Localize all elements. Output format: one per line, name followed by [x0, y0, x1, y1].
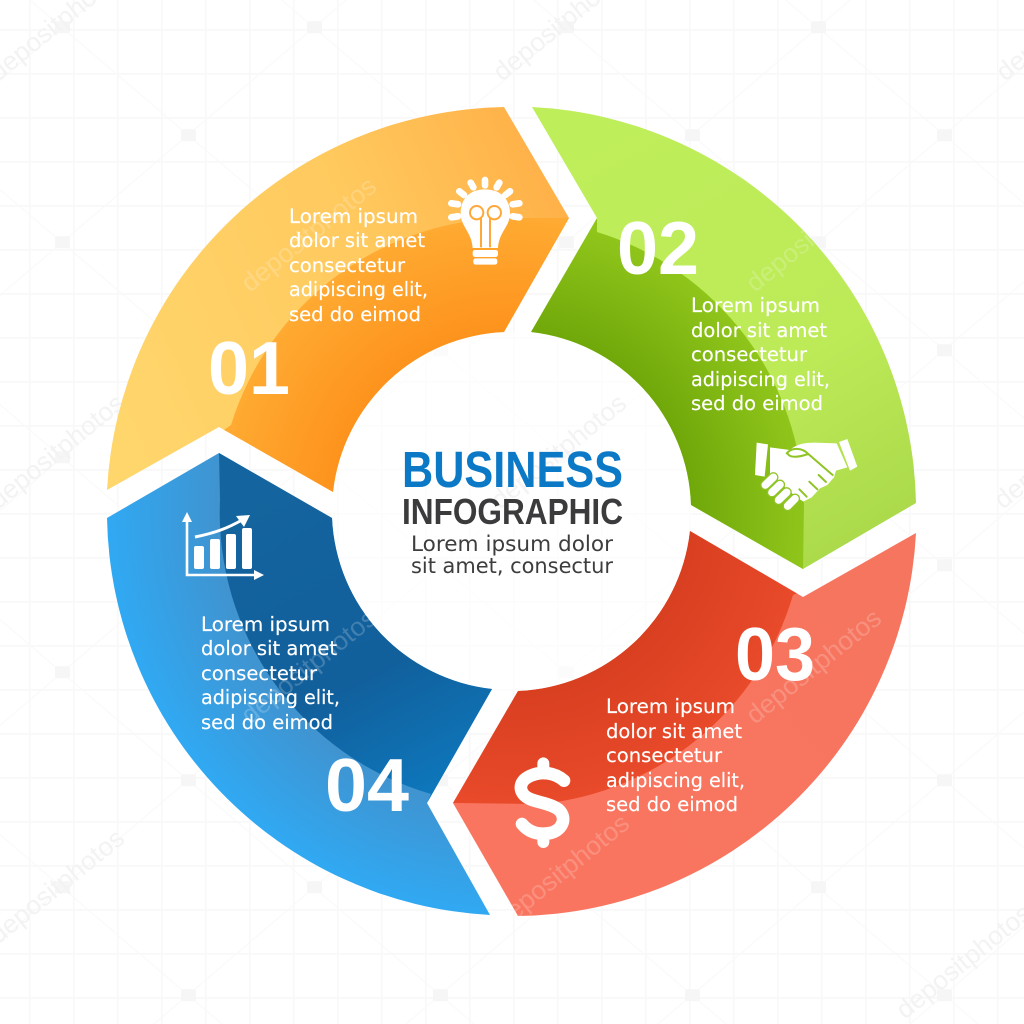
icon: handshake [755, 439, 857, 506]
text block: segment 04: Lorem ipsum [201, 613, 330, 636]
text block: segment 03 [606, 695, 745, 816]
text: depositphotos [485, 388, 632, 515]
text: depositphotos [488, 808, 635, 935]
heading: business infographic: sit amet, consectur [411, 554, 613, 579]
panel: segment 01 orange [107, 107, 570, 520]
text block: segment 04: dolor sit amet [201, 637, 337, 660]
text block: segment 04: sed do eimod [201, 711, 333, 734]
text block: segment 03: sed do eimod [606, 793, 738, 816]
text: depositphotos [740, 603, 887, 730]
heading: business infographic [402, 441, 623, 579]
text block: segment 02: adipiscing elit, [691, 368, 830, 391]
panel: segment 04 blue [107, 440, 520, 915]
text block: segment 01: consectetur [289, 254, 406, 277]
icon: light bulb [451, 180, 519, 265]
text block: segment 03: consectetur [606, 744, 723, 767]
icon: dollar sign [521, 763, 564, 842]
text block: segment 02: consectetur [691, 343, 808, 366]
heading: business infographic: BUSINESS [402, 441, 623, 498]
icon: bar chart with arrow [182, 512, 264, 580]
panel: segment 03 red [453, 531, 916, 916]
text block: segment 02: sed do eimod [691, 392, 823, 415]
text block: segment 03: Lorem ipsum [606, 695, 735, 718]
text block: segment 03: dolor sit amet [606, 720, 742, 743]
text: depositphotos [235, 603, 382, 730]
text block: segment 02 [691, 294, 830, 415]
text: depositphotos [235, 171, 382, 298]
number 04: 04 [325, 743, 409, 827]
text block: segment 02: Lorem ipsum [691, 294, 820, 317]
text block: segment 04: adipiscing elit, [201, 686, 340, 709]
text: depositphotos [740, 171, 887, 298]
panel: segment 02 green [531, 107, 916, 569]
heading: business infographic: Lorem ipsum dolor [411, 532, 613, 557]
text block: segment 03: adipiscing elit, [606, 769, 745, 792]
text block: segment 04: consectetur [201, 662, 318, 685]
text block: segment 01: dolor sit amet [289, 229, 425, 252]
number 01: 01 [208, 326, 290, 410]
text block: segment 01: sed do eimod [289, 303, 421, 326]
text block: segment 01: Lorem ipsum [289, 205, 418, 228]
text block: segment 02: dolor sit amet [691, 319, 827, 342]
heading: business infographic: INFOGRAPHIC [402, 491, 623, 532]
number 03: 03 [735, 612, 815, 696]
text block: segment 01: adipiscing elit, [289, 278, 428, 301]
text block: segment 04 [201, 613, 340, 734]
text block: segment 01 [289, 205, 428, 326]
number 02: 02 [617, 206, 699, 290]
